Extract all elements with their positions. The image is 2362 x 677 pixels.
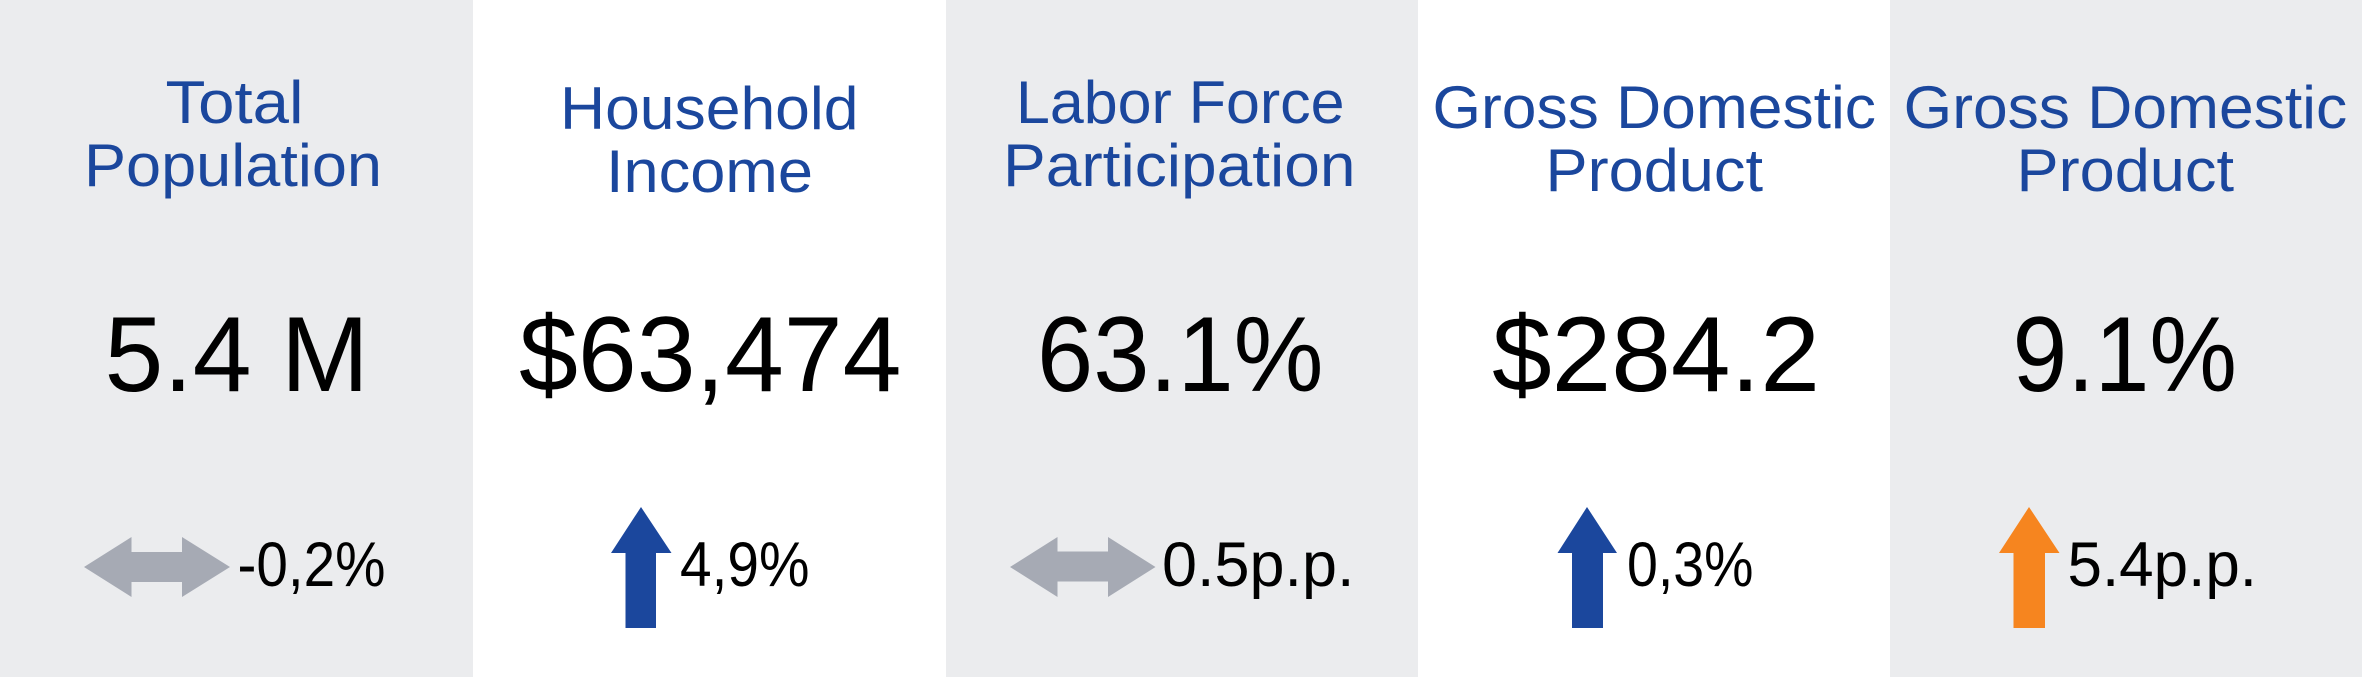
icon: grey double arrow xyxy=(84,537,230,597)
heading: household income: Household xyxy=(560,75,858,142)
change: 0,3%: 0,3% xyxy=(1627,530,1754,600)
heading: labor force participation: Participation xyxy=(1003,132,1356,199)
heading: total population: Population xyxy=(84,132,382,199)
value: 5.4 M: 5.4 M xyxy=(104,294,369,414)
panel: total population xyxy=(0,0,473,677)
value: $284.2: $284.2 xyxy=(1492,294,1820,414)
change: -0,2%: -0,2% xyxy=(238,530,386,600)
change: 5.4p.p.: 5.4p.p. xyxy=(2068,530,2257,600)
icon: grey double arrow xyxy=(1010,537,1156,597)
change: 0.5p.p.: 0.5p.p. xyxy=(1162,530,1354,600)
heading: household income: Income xyxy=(606,138,813,205)
icon: orange up arrow xyxy=(1999,507,2060,628)
heading: gross domestic product: Product xyxy=(2016,137,2234,204)
heading: gross domestic product: Gross Domestic xyxy=(1904,74,2347,141)
heading: gross domestic product xyxy=(1904,74,2347,204)
heading: total population xyxy=(84,69,382,199)
heading: gross domestic product xyxy=(1432,74,1876,204)
value: 9.1%: 9.1% xyxy=(2012,294,2237,414)
value: 63.1%: 63.1% xyxy=(1037,294,1324,414)
panel: gross domestic product, dollars xyxy=(1418,0,1890,677)
panel: household income xyxy=(473,0,946,677)
heading: gross domestic product: Product xyxy=(1546,137,1763,204)
panel: labor force participation xyxy=(946,0,1418,677)
panel: gross domestic product, percent xyxy=(1890,0,2362,677)
value: $63,474: $63,474 xyxy=(519,294,902,414)
heading: household income xyxy=(560,75,858,205)
heading: labor force participation: Labor Force xyxy=(1016,69,1344,136)
change: 4,9%: 4,9% xyxy=(680,530,810,600)
icon: blue up arrow xyxy=(611,507,672,628)
heading: labor force participation xyxy=(1003,69,1356,199)
heading: total population: Total xyxy=(166,69,304,136)
heading: gross domestic product: Gross Domestic xyxy=(1432,74,1876,141)
icon: blue up arrow xyxy=(1558,507,1617,628)
